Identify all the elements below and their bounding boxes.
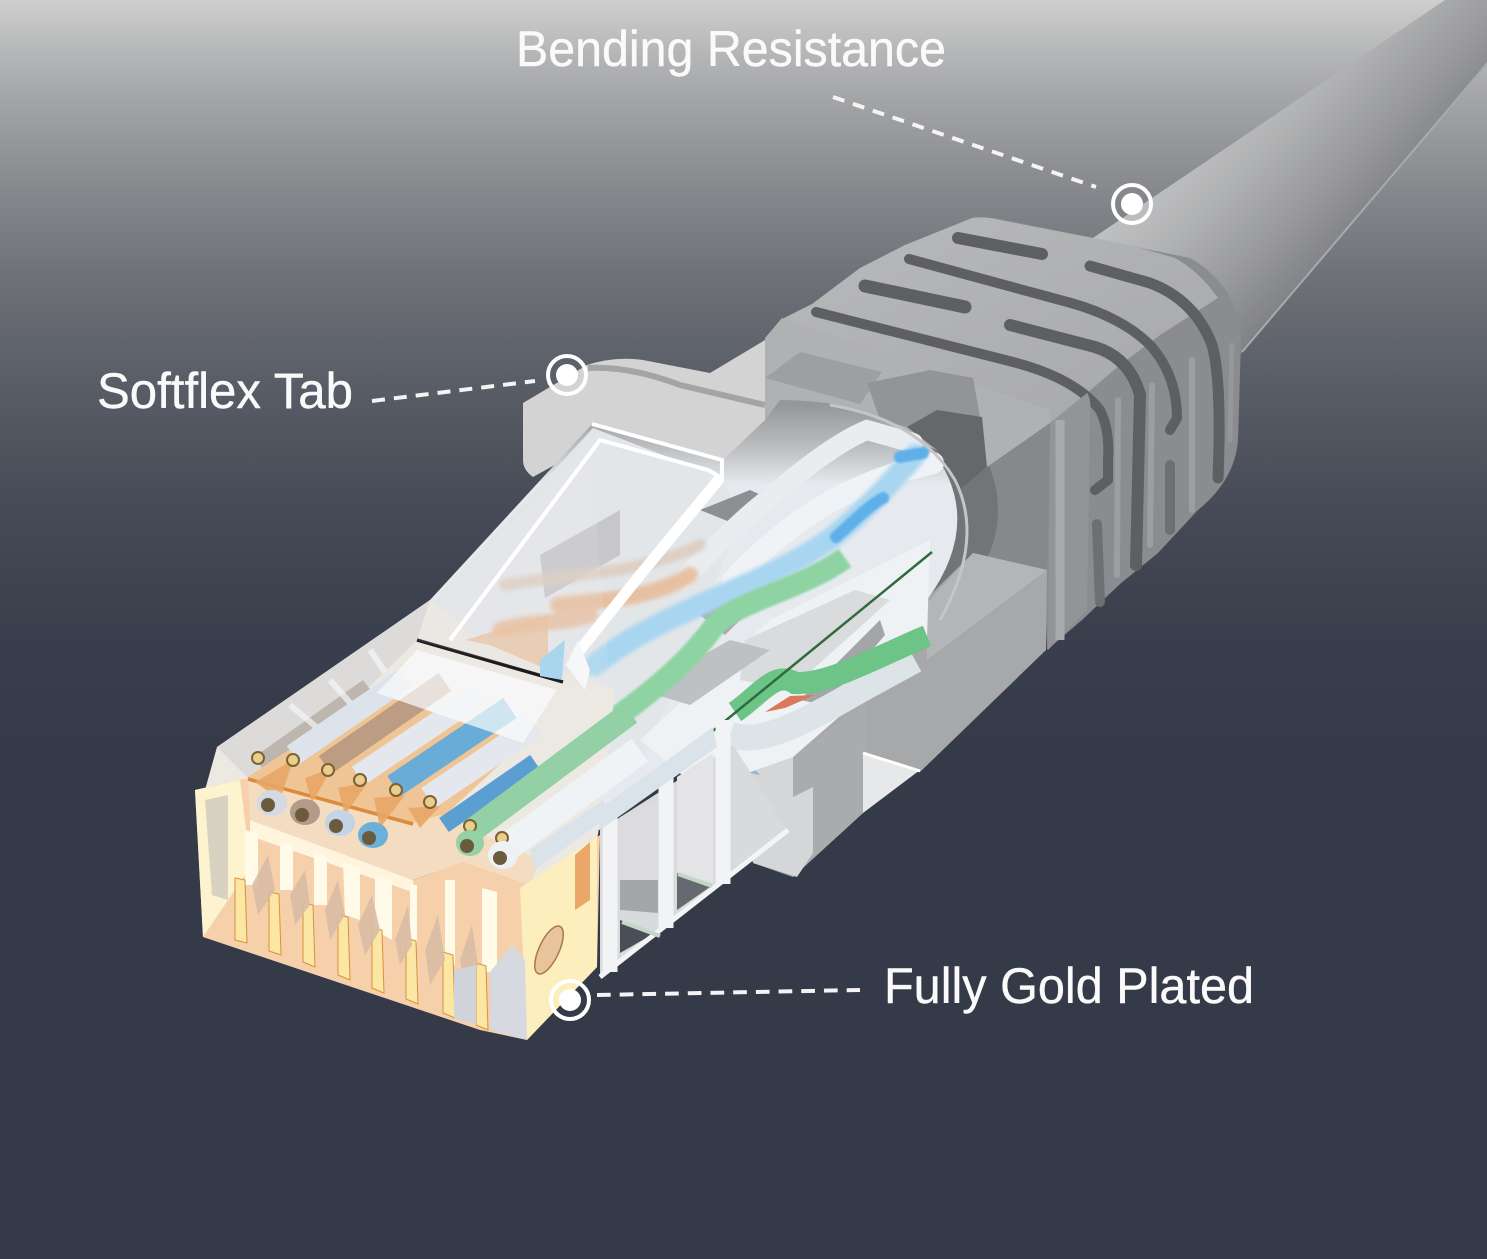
label: Softflex Tab: Softflex Tab bbox=[97, 363, 353, 419]
gold plated front bbox=[195, 778, 600, 1040]
dark green edge bbox=[610, 552, 932, 815]
rear clip bbox=[867, 370, 980, 427]
lower wire recess bbox=[248, 778, 540, 885]
lower gray block bbox=[730, 553, 1047, 877]
upper copper recess bbox=[247, 693, 523, 823]
label: Softflex Tab bbox=[97, 356, 586, 419]
cage pillars bbox=[610, 720, 723, 972]
label: Bending Resistance: Bending Resistance bbox=[516, 21, 946, 77]
orange ledge bbox=[248, 779, 413, 824]
block top face bbox=[925, 553, 1047, 660]
orange small wire bbox=[765, 695, 815, 712]
clear bottom corners bbox=[454, 965, 476, 1025]
lower white loop bbox=[730, 660, 915, 738]
block column bbox=[793, 700, 867, 877]
lower green wire bbox=[735, 636, 927, 712]
label: Fully Gold Plated bbox=[551, 958, 1254, 1019]
blue wire deep tone bbox=[836, 453, 923, 537]
gold fingers bbox=[235, 878, 488, 1030]
connector rear housing bbox=[730, 318, 1050, 877]
top white ledge bbox=[250, 820, 415, 893]
contact stripes bbox=[245, 830, 497, 975]
latch front reflections bbox=[417, 440, 610, 690]
clear plug body with wires bbox=[400, 400, 967, 832]
green wire bbox=[470, 558, 845, 832]
plug top wire section bbox=[205, 440, 640, 890]
block inner light panel bbox=[733, 750, 813, 877]
wire end caps bbox=[252, 752, 508, 844]
rear clip shadow bbox=[907, 410, 987, 490]
clear shell base bbox=[205, 600, 615, 890]
orange side streak bbox=[575, 842, 590, 910]
clear ring arc bbox=[830, 405, 967, 620]
yellow right panel bbox=[520, 837, 597, 1040]
rear top recess bbox=[765, 352, 882, 404]
label: Fully Gold Plated: Fully Gold Plated bbox=[884, 958, 1254, 1014]
rear top plate bbox=[765, 318, 1050, 490]
boot front collar bbox=[1048, 393, 1091, 650]
right side rail bbox=[530, 800, 610, 870]
gold face base bbox=[195, 778, 600, 1040]
cable bbox=[1090, 0, 1487, 355]
boot top surface bbox=[780, 217, 1218, 423]
cage bottom rail bbox=[600, 830, 788, 977]
softflex tab bbox=[523, 340, 765, 520]
cage top rail bbox=[580, 727, 717, 830]
latch lip black line bbox=[417, 640, 563, 682]
clear left strip bbox=[217, 600, 430, 777]
white lower panel bbox=[640, 540, 930, 790]
blue wire bbox=[595, 455, 915, 665]
rear ring bbox=[772, 397, 998, 623]
label: Bending Resistance bbox=[516, 21, 1151, 223]
clear main body bbox=[400, 400, 957, 815]
clear rear cage bbox=[580, 720, 788, 977]
orange contact tops bbox=[255, 760, 440, 828]
orange wires bbox=[500, 545, 700, 630]
eight wires bbox=[293, 678, 640, 850]
clear latch bbox=[450, 424, 722, 690]
boot grooves bbox=[816, 238, 1232, 602]
strain relief boot bbox=[780, 217, 1241, 650]
boot body side bbox=[812, 218, 1241, 650]
rear block right face bbox=[780, 345, 1050, 640]
front row wires bbox=[257, 790, 518, 869]
cage base bbox=[600, 745, 787, 977]
left body light fill bbox=[400, 428, 740, 770]
window one bbox=[620, 800, 658, 913]
terminal shapes bbox=[252, 855, 478, 990]
block notch bbox=[863, 753, 920, 813]
dark rear band bbox=[700, 490, 772, 522]
body grey core shadows bbox=[540, 510, 890, 705]
frosted wire window bbox=[377, 650, 557, 743]
window two bbox=[677, 753, 713, 883]
white internal wires bbox=[683, 430, 933, 580]
gold logo mark bbox=[529, 922, 569, 978]
